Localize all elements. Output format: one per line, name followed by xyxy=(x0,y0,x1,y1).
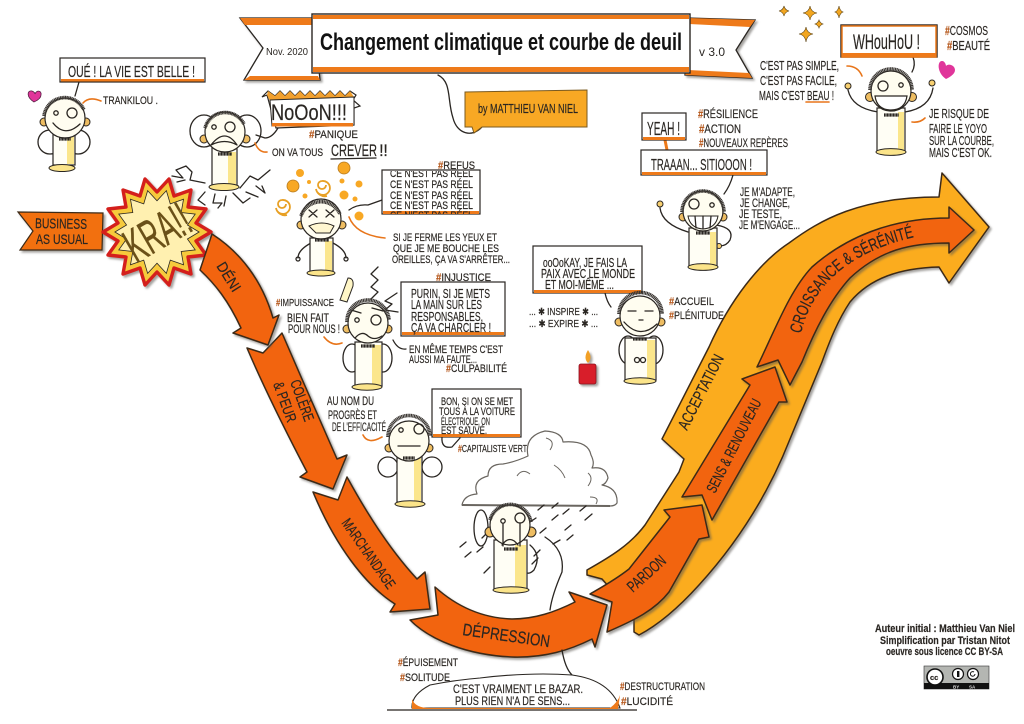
arrow: déni xyxy=(200,234,279,345)
stress marks xyxy=(371,267,398,312)
arrow: sens et renouveau xyxy=(682,367,787,520)
caption: TRANKILOU . xyxy=(103,95,158,107)
connector to bubble xyxy=(562,650,572,675)
character: depressed under cloud xyxy=(387,431,705,710)
yeah bubble xyxy=(642,113,686,150)
breathing text xyxy=(529,307,598,330)
impuissance tag: #IMPUISSANCE xyxy=(276,297,334,309)
light bulb xyxy=(340,278,353,302)
labels: COLÈRE xyxy=(286,378,317,424)
caption: ON VA TOUS xyxy=(272,147,323,159)
character: denial xyxy=(276,160,510,276)
right caption: EN MÊME TEMPS C'EST xyxy=(409,343,503,356)
caption: JE CHANGE, xyxy=(740,196,790,210)
character: resilience xyxy=(641,106,800,270)
flattened bubble: PLUS RIEN N'A DE SENS... xyxy=(455,694,570,708)
arrow: pardon xyxy=(590,505,709,632)
caption: OREILLES, ÇA VA S'ARRÊTER... xyxy=(392,253,510,266)
right caption: JE RISQUE DE xyxy=(929,106,989,121)
label: CROISSANCE & SÉRÉNITÉ xyxy=(790,223,914,332)
shout bubble xyxy=(256,91,360,138)
caption: JE M'ENGAGE... xyxy=(739,218,800,232)
right caption xyxy=(912,106,994,160)
shout bubble: NoOoN!!! xyxy=(271,100,347,125)
left caption xyxy=(327,394,386,441)
right ribbon xyxy=(685,18,755,78)
repeated speech box xyxy=(348,169,481,215)
label: DÉPRESSION xyxy=(461,620,551,651)
repeated speech box: CE N'EST PAS RÉEL xyxy=(390,199,473,212)
left caption: DE L'EFFICACITÉ xyxy=(332,419,386,434)
character: tranquil xyxy=(28,58,205,172)
repeated speech box: CE N'EST PAS RÉEL xyxy=(390,167,473,180)
labels xyxy=(269,378,317,425)
caption xyxy=(349,217,510,266)
right caption xyxy=(393,340,503,366)
caption: CREVER xyxy=(331,141,377,160)
yellow arrow: acceptation xyxy=(587,173,989,635)
heart xyxy=(939,61,955,79)
rain xyxy=(460,503,592,573)
title box xyxy=(312,14,690,73)
label: MARCHANDAGE xyxy=(338,516,399,592)
label: DÉNI xyxy=(213,259,244,295)
tags xyxy=(945,23,990,53)
tags xyxy=(669,296,724,322)
CC BY-SA badge: BY xyxy=(953,684,959,689)
breathing text: ... ✱ EXPIRE ✱ ... xyxy=(529,319,598,330)
character: green capitalist xyxy=(327,389,527,507)
speech bubble: WHouHoU ! xyxy=(853,31,920,54)
sparkles xyxy=(779,6,843,42)
transition bubble xyxy=(641,150,767,194)
left caption: AU NOM DU xyxy=(327,394,374,408)
tags: #ACTION xyxy=(699,122,741,136)
caption xyxy=(83,95,158,107)
caption xyxy=(255,141,388,160)
left ribbon xyxy=(240,18,320,80)
author tag: by MATTHIEU VAN NIEL xyxy=(478,102,578,116)
exhaustion tags: #ÉPUISEMENT xyxy=(398,656,458,669)
caption: SI JE FERME LES YEUX ET xyxy=(393,232,497,244)
speech bubble xyxy=(60,58,205,96)
business as usual ribbon xyxy=(18,212,103,250)
speech box xyxy=(432,389,521,447)
speech box xyxy=(533,246,642,307)
credits xyxy=(875,623,1015,658)
lucidity tags: #LUCIDITÉ xyxy=(621,695,673,708)
figure xyxy=(845,69,935,155)
flattened bubble: C'EST VRAIMENT LE BAZAR. xyxy=(453,682,583,696)
speech box: BON, SI ON SE MET xyxy=(441,396,513,408)
caption: JE TESTE, xyxy=(739,207,782,221)
speech bubble: OUÉ ! LA VIE EST BELLE ! xyxy=(68,62,195,81)
figure xyxy=(190,112,261,190)
lucidity tags: #DESTRUCTURATION xyxy=(620,681,705,693)
tags: #BEAUTÉ xyxy=(947,38,990,53)
refus tag: #REFUS xyxy=(438,160,475,172)
repeated speech box: CE N'EST PAS RÉEL xyxy=(390,209,473,222)
left caption: BIEN FAIT xyxy=(287,313,329,325)
CC BY-SA badge: cc xyxy=(930,673,938,682)
figure xyxy=(38,98,90,172)
tags: #ACCUEIL xyxy=(669,296,714,308)
tags: #NOUVEAUX REPÈRES xyxy=(699,135,788,150)
speech box: TOUS À LA VOITURE xyxy=(439,405,515,418)
breathing text: ... ✱ INSPIRE ✱ ... xyxy=(529,307,598,318)
business as usual ribbon: BUSINESS xyxy=(35,215,87,232)
figure xyxy=(657,191,731,270)
arrow: colère et peur xyxy=(247,333,347,489)
tags: #PLÉNITUDE xyxy=(669,309,724,322)
speech box xyxy=(401,282,505,336)
version: v 3.0 xyxy=(699,45,725,59)
speech box: RESPONSABLES, xyxy=(411,309,483,324)
title banner xyxy=(240,14,755,80)
author tag xyxy=(438,75,587,133)
figure xyxy=(615,292,665,384)
figure xyxy=(378,415,442,507)
capitaliste tag: #CAPITALISTE VERT xyxy=(458,444,527,455)
yeah bubble: YEAH ! xyxy=(647,119,680,139)
speech box: PAIX AVEC LE MONDE xyxy=(541,267,635,281)
injustice tag: #INJUSTICE xyxy=(436,272,491,284)
left caption: POUR NOUS ! xyxy=(288,324,340,336)
left caption: C'EST PAS SIMPLE, xyxy=(760,58,839,73)
repeated speech box: CE N'EST PAS RÉEL xyxy=(390,189,473,202)
cloud xyxy=(462,431,617,506)
character: acceptance xyxy=(529,246,724,384)
tags: #RÉSILIENCE xyxy=(698,106,758,121)
caption: QUE JE ME BOUCHE LES xyxy=(393,243,499,255)
character: whouhou xyxy=(759,23,994,160)
KRA explosion: KRA!! xyxy=(115,193,200,273)
speech box: LA MAIN SUR LES xyxy=(411,297,482,312)
speech box: ooOoKAY, JE FAIS LA xyxy=(543,256,627,270)
speech box: ET MOI-MÊME ... xyxy=(545,277,614,292)
left caption: MAIS C'EST BEAU ! xyxy=(759,88,834,103)
caption: JE M'ADAPTE, xyxy=(740,185,795,199)
KRA explosion xyxy=(103,179,211,285)
candle xyxy=(579,350,596,384)
label: ACCEPTATION xyxy=(675,352,728,433)
arrow: dépression xyxy=(410,587,607,657)
repeated speech box: CE N'EST PAS RÉEL xyxy=(390,178,473,191)
exhaustion tags xyxy=(398,656,458,684)
exhaustion tags: #SOLITUDE xyxy=(400,672,450,684)
lucidity tags xyxy=(620,681,705,708)
culpabilité tag: #CULPABILITÉ xyxy=(446,362,507,375)
figure xyxy=(474,504,562,610)
label: SENS & RENOUVEAU xyxy=(703,396,765,496)
arrow: croissance et sérénité xyxy=(756,206,978,388)
left caption: PROGRÈS ET xyxy=(328,407,377,422)
figure xyxy=(296,199,348,276)
title text: Changement climatique et courbe de deuil xyxy=(320,29,682,56)
transition bubble: TRAAAN... SITIOOON ! xyxy=(651,157,752,174)
labels: & PEUR xyxy=(269,380,300,425)
arrow: marchandage xyxy=(313,477,430,612)
CC BY-SA badge: SA xyxy=(969,684,976,689)
left caption: C'EST PAS FACILE, xyxy=(760,73,837,88)
panic tag: #PANIQUE xyxy=(309,129,358,141)
tags xyxy=(698,106,788,150)
thought swirls xyxy=(276,162,364,220)
right caption: AUSSI MA FAUTE... xyxy=(409,354,477,366)
caption: !! xyxy=(379,141,388,160)
character: panic xyxy=(172,91,388,208)
figure xyxy=(343,300,392,390)
speech box: ÉLECTRIQUE, ON xyxy=(441,415,490,428)
heart xyxy=(28,91,41,102)
ground cracks xyxy=(172,166,270,208)
speech box: EST SAUVÉ. xyxy=(441,424,487,437)
speech box: PURIN, SI JE METS xyxy=(411,286,490,301)
flattened bubble xyxy=(387,674,637,710)
tags: #COSMOS xyxy=(945,23,988,38)
character: injustice xyxy=(276,267,507,390)
left caption xyxy=(287,313,342,344)
speech bubble xyxy=(841,25,937,72)
date: Nov. 2020 xyxy=(266,46,308,58)
caption xyxy=(739,185,800,232)
label: PARDON xyxy=(624,553,670,596)
CC BY-SA badge xyxy=(924,666,989,689)
speech box: ÇA VA CHARCLER ! xyxy=(411,320,491,335)
business as usual ribbon: AS USUAL xyxy=(36,231,88,247)
left caption xyxy=(759,58,862,103)
